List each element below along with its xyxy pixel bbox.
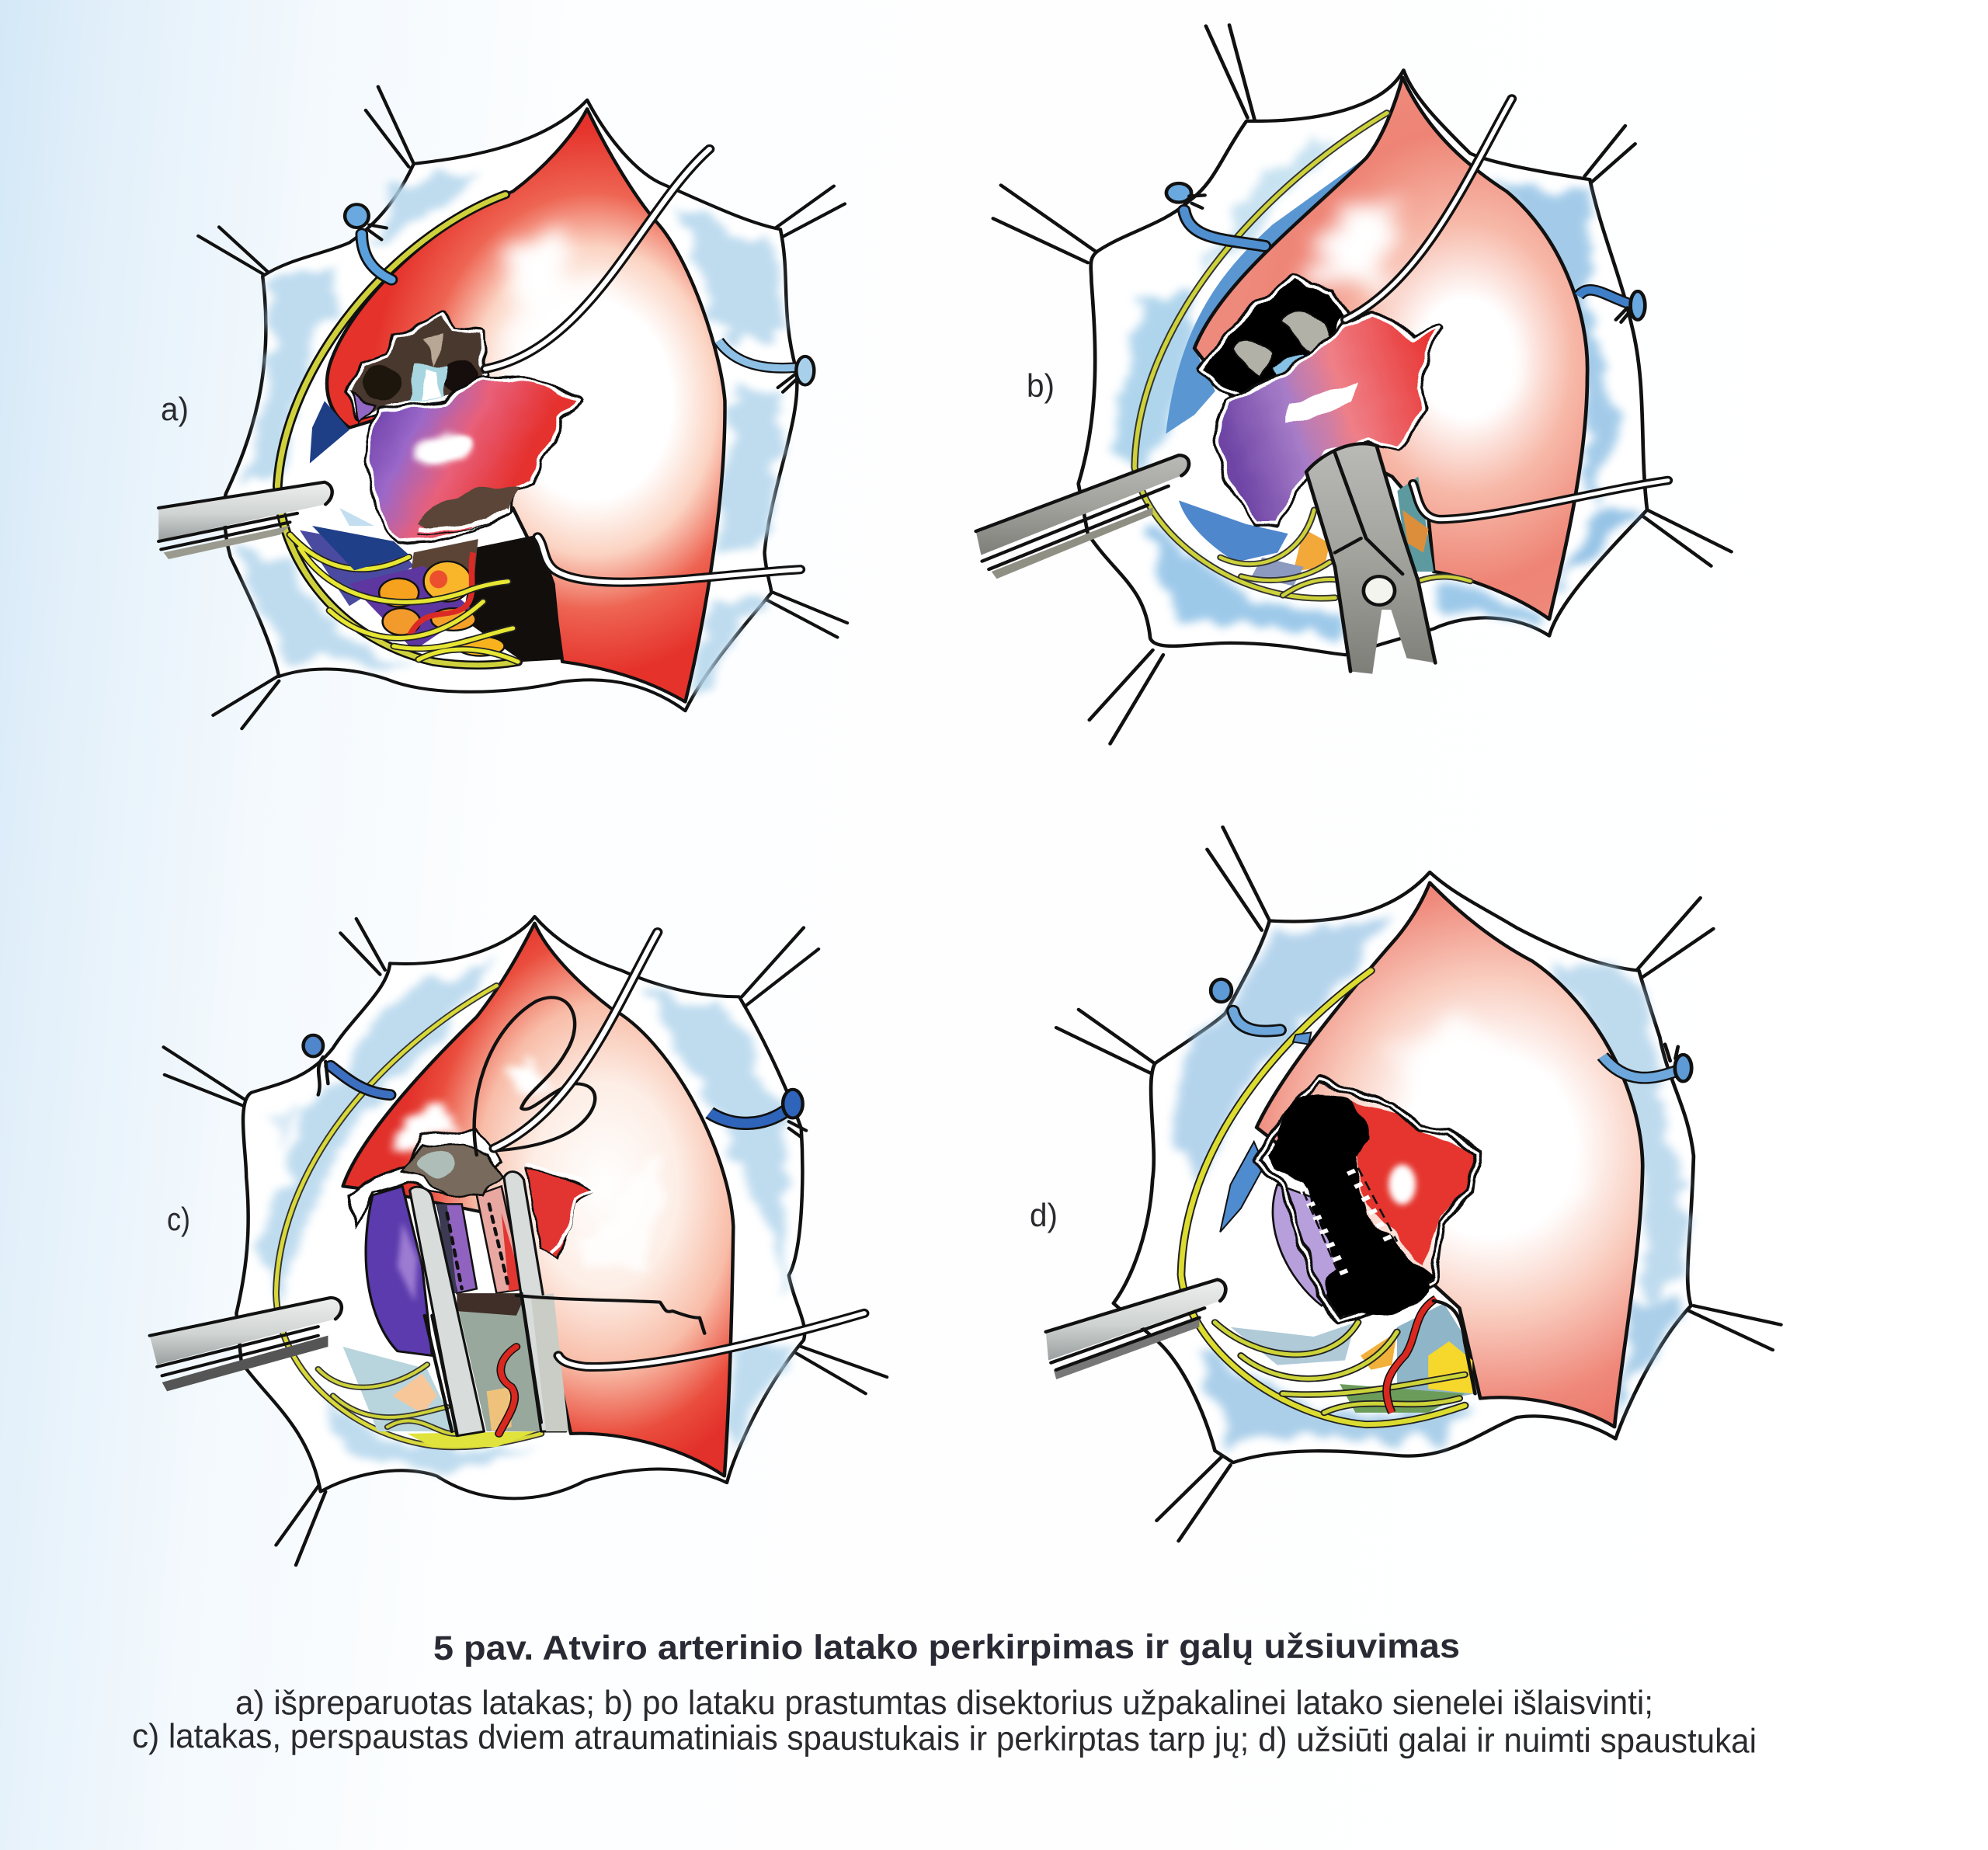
aorta vessel b: [1219, 312, 1439, 524]
red artery c: [499, 1347, 516, 1434]
forceps b: [976, 455, 1189, 579]
drape b: [1079, 70, 1647, 655]
suture loop c: [474, 997, 595, 1155]
pericardial blue shadow a: [310, 401, 349, 464]
stay sutures a: [198, 87, 847, 729]
ventricle purple c: [366, 1186, 432, 1355]
stay sutures c: [164, 919, 887, 1565]
blue wash d: [1168, 913, 1691, 1441]
lower wall line d: [1434, 1301, 1475, 1393]
sutured ends d: [1303, 1168, 1397, 1274]
heart highlight b: [1304, 201, 1517, 415]
heart highlight a: [493, 231, 622, 365]
atrium purple d: [1273, 1184, 1355, 1306]
gauze and blue pocket a: [295, 423, 408, 570]
nerve b: [1135, 113, 1387, 598]
purple deep a: [349, 566, 473, 651]
duct opening b: [1202, 277, 1345, 401]
panel b: dissector under duct: [976, 25, 1732, 744]
blue wash a: [231, 169, 791, 695]
tube with knot right b: [1579, 290, 1645, 322]
pericardium blue d: [1220, 1142, 1264, 1232]
forceps a: [158, 482, 332, 559]
panel d: sutured ends: [1046, 827, 1781, 1541]
red artery a: [408, 552, 473, 637]
panel a: dissected duct: [158, 87, 847, 729]
tube with knot right c: [710, 1090, 806, 1137]
title: 5 pav. Atviro arterinio latako perkirpimas ir galų užsiuvimas: [433, 1627, 1460, 1667]
duct stumps c: [437, 1186, 527, 1316]
lower tissues b: [1179, 477, 1434, 586]
heart d: [1256, 882, 1642, 1427]
tube with knot upper left d: [1211, 979, 1311, 1045]
vessel red d: [1256, 1080, 1478, 1323]
tube with knot right d: [1603, 1045, 1691, 1081]
tube with knot upper left c: [304, 1035, 390, 1095]
tube with knot upper left a: [345, 204, 391, 280]
heart a: [327, 109, 725, 702]
caption: a) išpreparuotas latakas; b) po lataku prastumtas disektorius užpakalinei latako sienelei išlaisvinti;: [235, 1684, 1653, 1722]
forceps d: [1046, 1280, 1225, 1379]
hook upper a: [485, 149, 710, 369]
stay sutures d: [1056, 827, 1781, 1541]
cavity lower a: [464, 534, 562, 662]
blue wash c: [259, 959, 789, 1472]
nerve c: [276, 986, 541, 1447]
drape a: [224, 100, 797, 711]
nerve a: [277, 194, 518, 665]
nerve branches a: [290, 534, 518, 662]
blue wash b: [1111, 134, 1637, 634]
heart highlight d: [1397, 1014, 1580, 1227]
red highlight d: [1388, 1164, 1416, 1205]
stay sutures b: [993, 25, 1732, 744]
nerve branches c: [318, 1365, 457, 1434]
hook upper c: [494, 932, 658, 1149]
caption: c) latakas, perspaustas dviem atraumatiniais spaustukais ir perkirptas tarp jų; d) užsiūti galai ir nuimti spaustukai: [132, 1717, 1757, 1761]
lower field d: [1231, 1303, 1475, 1413]
pericardium blue b: [1166, 153, 1371, 434]
lower field c: [343, 1293, 546, 1447]
nerve branches d: [1215, 1323, 1465, 1413]
nerve d: [1181, 971, 1465, 1424]
nerve branches b: [1221, 509, 1470, 596]
label b: b): [1027, 367, 1055, 404]
clamp right c: [504, 1172, 568, 1431]
label a: a): [161, 391, 189, 427]
panel c: duct cut between clamps: [150, 916, 887, 1565]
tissue top c: [348, 1128, 502, 1226]
scissors dissector b: [1306, 443, 1435, 674]
tube with knot upper left b: [1166, 183, 1265, 246]
orange nodes a: [379, 562, 505, 656]
hook lower a: [537, 537, 800, 582]
forceps c: [150, 1298, 342, 1391]
heart highlight c: [398, 1057, 655, 1275]
heart c: [343, 923, 733, 1476]
suture needle line c: [516, 1295, 704, 1334]
gauze c: [308, 1231, 383, 1347]
gauze b: [1169, 405, 1262, 527]
caption: [132, 1684, 1757, 1761]
label c: c): [167, 1201, 190, 1237]
aorta vessel a: [370, 380, 580, 541]
hook lower b: [1413, 481, 1668, 520]
clamp left c: [410, 1187, 484, 1436]
duct opening a: [349, 314, 485, 423]
hook upper b: [1345, 99, 1512, 320]
drape c: [236, 916, 805, 1498]
brown tissue a: [408, 539, 478, 588]
heart b: [1194, 78, 1587, 619]
label d: d): [1030, 1197, 1058, 1233]
drape d: [1114, 872, 1694, 1462]
hook lower c: [558, 1313, 864, 1367]
tube with knot right a: [718, 341, 814, 392]
red vessel stump c: [527, 1165, 596, 1257]
surrounding tissue a: [300, 530, 414, 606]
gauze d: [1194, 1191, 1322, 1334]
red artery d: [1386, 1299, 1436, 1413]
